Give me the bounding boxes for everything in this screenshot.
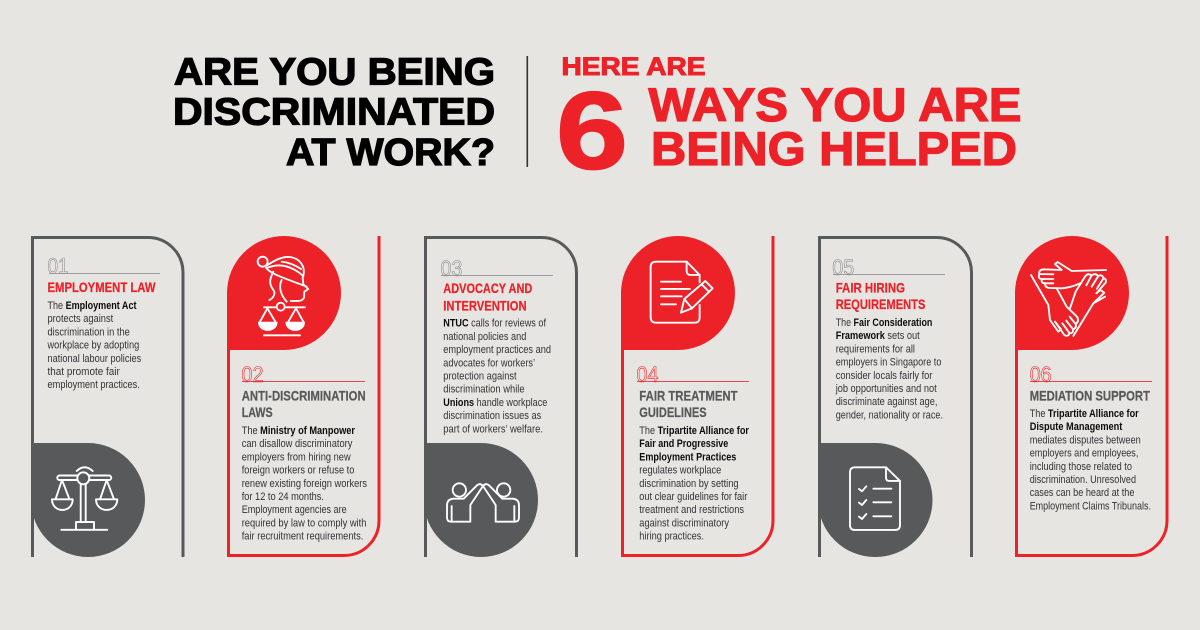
text: panel 5 body: The Fair Consideration [836,317,932,329]
text: panel 2 body [242,425,367,543]
text: panel 2 body: renew existing foreign workers [242,478,367,490]
panel 5: fair hiring requirements: 05 [832,255,854,280]
title: are you being discriminated at work: AT WORK? [286,132,495,174]
text: panel 3 body [443,318,551,435]
panel 6: mediation support: 06 [1030,362,1052,387]
title: are you being discriminated at work [173,52,495,174]
text: panel 5 body: employers in Singapore to [836,357,941,369]
panel 1: employment law: 01 [48,254,68,278]
text: panel 2 body: foreign workers or refuse to [242,465,354,477]
text: panel 2 body: Employment agencies are [242,504,347,516]
icon: two people high five [424,443,538,557]
text: panel 3 body: employment practices and [443,344,551,356]
panel 3: advocacy and intervention: ADVOCACY AND [443,280,532,296]
panel 4: fair treatment guidelines: GUIDELINES [639,404,707,420]
text: panel 4 body: against discriminatory [639,517,730,529]
text: panel 4 body: Fair and Progressive [639,438,728,450]
text: panel 4 body: regulates workplace [639,465,721,477]
panel 2: anti-discrimination laws: 02 [242,362,264,387]
text: panel 1 body: that promote fair [48,366,120,378]
heading: here are 6 ways you are being helped [556,53,1022,192]
icon: three joined hands [1015,236,1129,350]
text: panel 6 body: including those related to [1030,461,1132,473]
text: panel 6 body: Employment Claims Tribunals. [1030,500,1151,512]
text: panel 6 body: cases can be heard at the [1030,487,1134,499]
text: panel 1 body: national labour policies [48,353,141,365]
icon: lady justice [227,236,341,350]
panel 5: fair hiring requirements: REQUIREMENTS [836,296,925,312]
text: panel 1 body: protects against [48,313,113,325]
panel 3: advocacy and intervention [424,238,576,557]
text: panel 5 body: gender, nationality or race. [836,409,943,421]
text: panel 3 body: part of workers’ welfare. [443,423,543,435]
title: are you being discriminated at work: ARE YOU BEING [174,52,495,94]
text: panel 6 body: employers and employees, [1030,448,1138,460]
title: are you being discriminated at work: DISCRIMINATED [173,92,495,134]
text: panel 6 body: Dispute Management [1030,421,1123,433]
text: panel 6 body: discrimination. Unresolved [1030,474,1136,486]
panel 3: advocacy and intervention: 03 [440,256,462,281]
panel 6: mediation support: MEDIATION SUPPORT [1030,388,1150,404]
panel 3: advocacy and intervention: INTERVENTION [443,298,527,314]
text: panel 3 body: protection against [443,370,517,382]
text: panel 4 body: hiring practices. [639,531,704,543]
panel 5: fair hiring requirements: FAIR HIRING [836,279,905,295]
text: panel 1 body: The Employment Act [48,300,137,312]
text: panel 2 body: fair recruitment requirements. [242,531,363,543]
text: panel 3 body: national policies and [443,331,526,343]
panel 1: employment law: EMPLOYMENT LAW [48,279,156,295]
text: panel 6 body: mediates disputes between [1030,434,1141,446]
text: panel 1 body [47,300,141,391]
text: panel 4 body: discrimination by setting [639,478,739,490]
text: panel 2 body: The Ministry of Manpower [242,425,355,437]
panel 4: fair treatment guidelines [621,236,773,556]
text: panel 5 body: job opportunities and not [835,383,937,395]
text: panel 4 body [639,425,749,543]
text: panel 2 body: employers from hiring new [242,451,351,463]
text: panel 2 body: required by law to comply with [242,517,366,529]
text: panel 3 body: NTUC calls for reviews of [443,318,546,330]
panel 1: employment law [31,238,183,557]
text: panel 5 body: Framework sets out [836,330,920,342]
heading: here are 6 ways you are being helped: HERE ARE [562,53,706,81]
text: panel 6 body [1030,408,1151,512]
panel 5: fair hiring requirements [818,238,972,557]
text: panel 5 body: requirements for all [836,343,915,355]
text: panel 3 body: Unions handle workplace [443,397,547,409]
text: panel 4 body: Employment Practices [639,451,736,463]
heading: here are 6 ways you are being helped: 6 [556,70,628,192]
text: panel 6 body: The Tripartite Alliance for [1030,408,1139,420]
text: panel 1 body: employment practices. [48,379,140,391]
text: panel 4 body: treatment and restrictions [639,504,744,516]
text: panel 5 body [835,317,943,421]
icon: balance scale [31,443,145,557]
text: panel 5 body: consider locals fairly for [836,370,933,382]
text: panel 1 body: workplace by adopting [47,340,139,352]
panel 2: anti-discrimination laws: LAWS [242,404,273,420]
heading: here are 6 ways you are being helped: WAYS YOU ARE [648,78,1022,131]
text: panel 4 body: out clear guidelines for fair [639,491,748,503]
text: panel 2 body: can disallow discriminatory [242,438,353,450]
text: panel 3 body: discrimination issues as [443,410,541,422]
heading: here are 6 ways you are being helped: BEING HELPED [651,122,1017,175]
panel 4: fair treatment guidelines: FAIR TREATMENT [639,388,738,404]
text: panel 3 body: advocates for workers’ [443,357,535,369]
text: panel 5 body: discriminate against age, [836,396,937,408]
panel 4: fair treatment guidelines: 04 [636,362,658,387]
icon: document and pencil [621,236,735,350]
text: panel 1 body: discrimination in the [48,326,130,338]
icon: checklist document [818,443,932,557]
panel 2: anti-discrimination laws: ANTI-DISCRIMINATION [242,388,366,404]
text: panel 3 body: discrimination while [443,384,525,396]
panel 2: anti-discrimination laws [227,236,379,556]
text: panel 4 body: The Tripartite Alliance for [639,425,749,437]
text: panel 2 body: for 12 to 24 months. [242,491,324,503]
panel 6: mediation support [1015,236,1167,556]
